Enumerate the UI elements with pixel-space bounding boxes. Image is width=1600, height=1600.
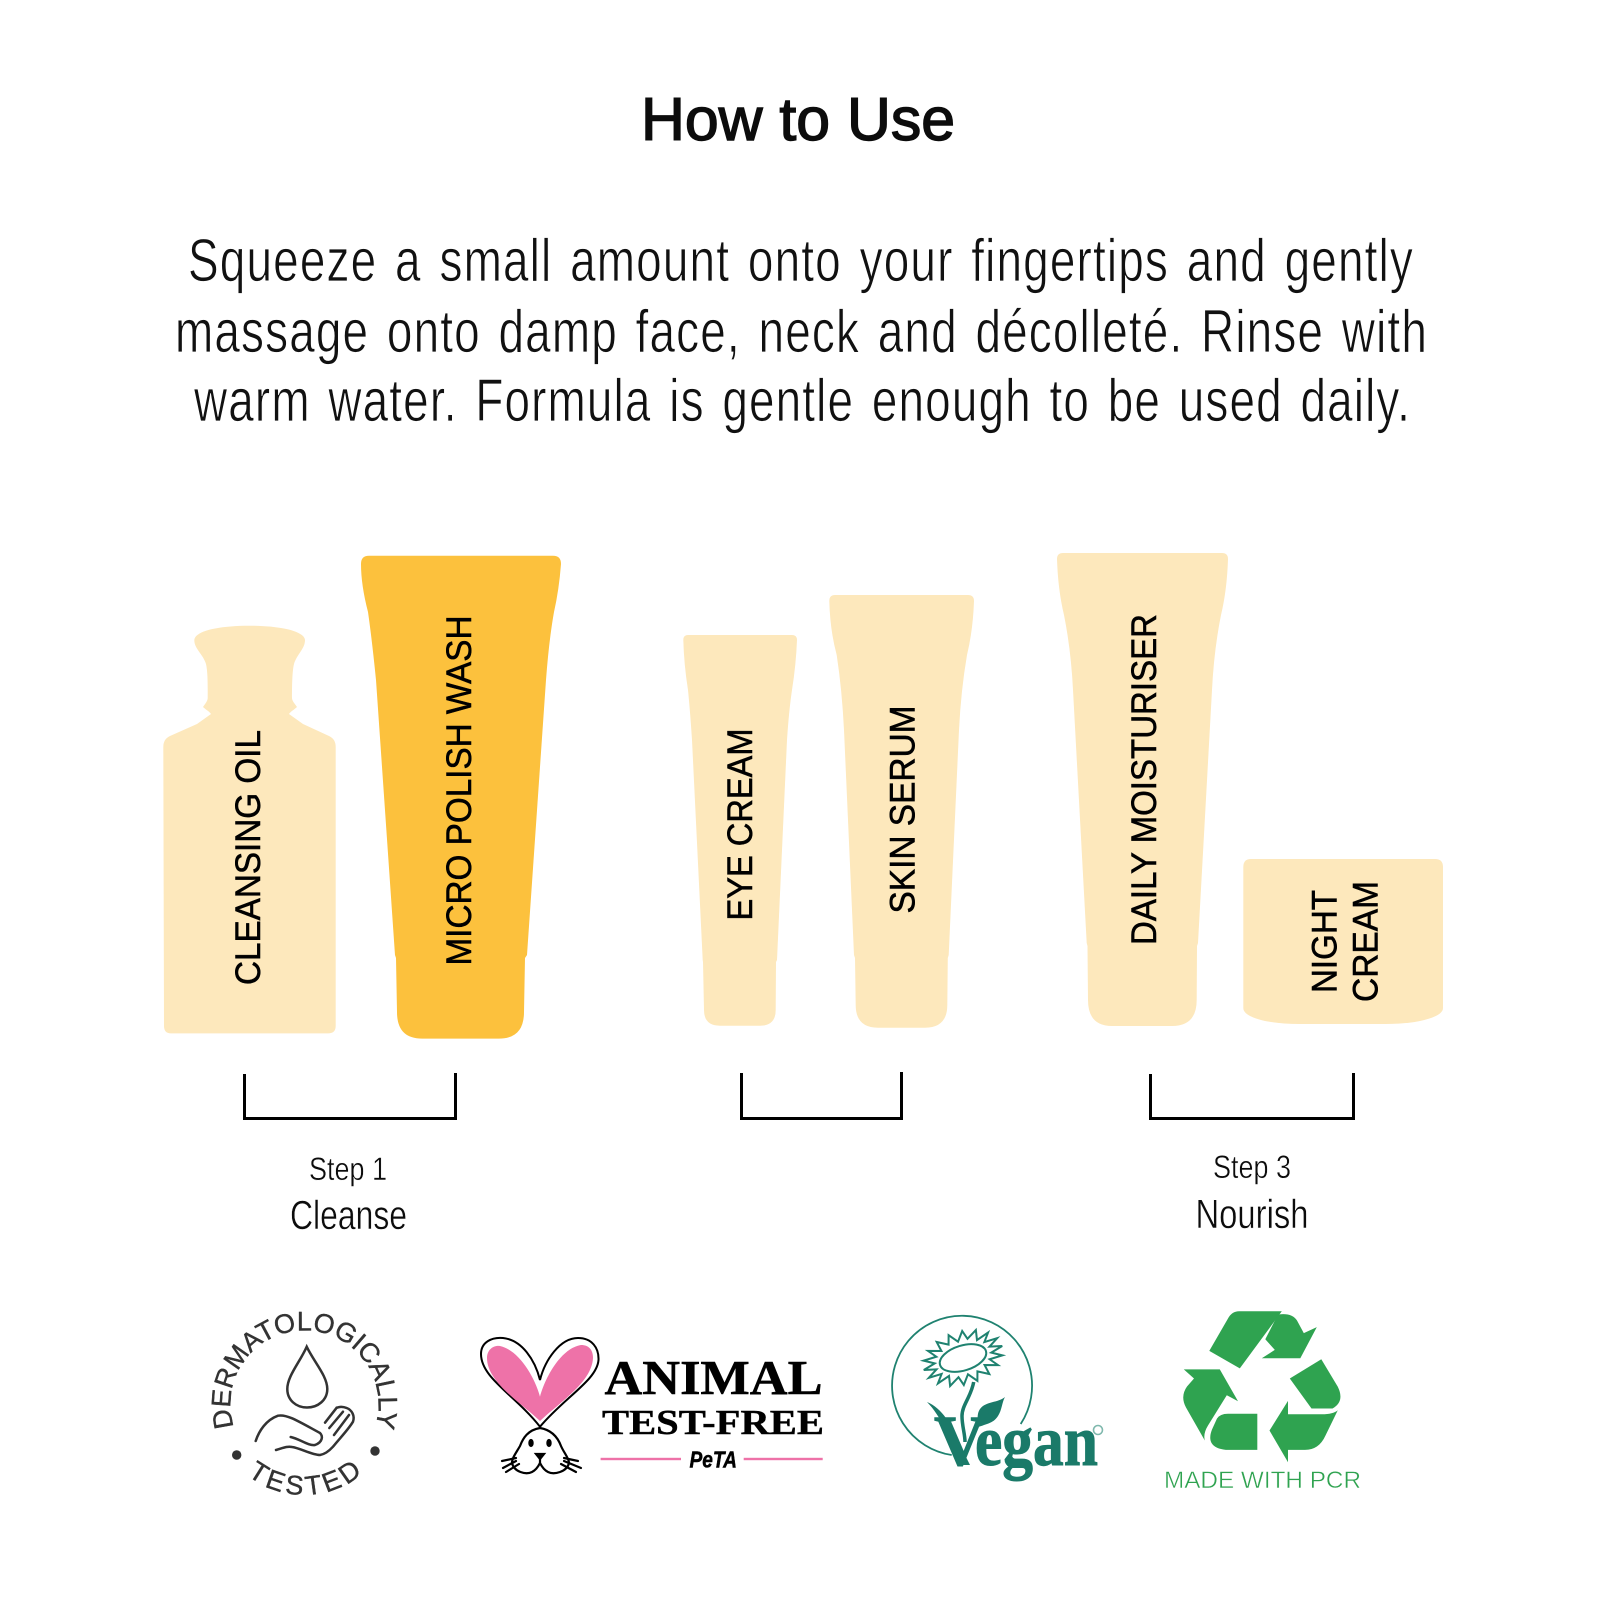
badge: peta animal test-free [481,1338,824,1473]
product: skin serum tube [829,595,974,1028]
label: eye cream: EYE CREAM [721,728,760,920]
label: daily moisturiser: DAILY MOISTURISER [1125,614,1164,945]
bracket: step 3 [1150,1073,1354,1118]
icon: bunny face [502,1428,581,1473]
step 3 caption: Step 3 [1213,1149,1291,1185]
label: cleansing oil: CLEANSING OIL [229,730,268,985]
circle outline [892,1316,1032,1455]
text: animal test-free: ANIMAL [604,1350,822,1405]
bracket: step 2 [742,1072,902,1118]
product: eye cream tube [683,635,797,1026]
wordmark: vegan: egan [975,1401,1098,1481]
badge: vegan sunflower [892,1316,1102,1481]
step 1 caption: Cleanse [290,1192,407,1238]
step 3 caption: Nourish [1196,1191,1308,1237]
title: How to Use [641,86,955,153]
badge: dermatologically tested [211,1312,398,1495]
product: night cream jar [1243,859,1443,1024]
icon: bunny ears heart [481,1338,599,1427]
icon: stem and leaf [927,1382,1005,1465]
icon: sunflower [916,1321,1010,1395]
label: micro polish wash: MICRO POLISH WASH [440,616,479,966]
product: daily moisturiser tube [1057,553,1228,1026]
text: animal test-free: TEST-FREE [602,1403,824,1442]
step 1 caption [290,1151,407,1238]
label: night cream: CREAM [1346,881,1386,1002]
badge: recycling symbol [1183,1311,1340,1462]
badge: dermatologically tested: DERMATOLOGICALLY [211,1312,398,1430]
caption: made with pcr: MADE WITH PCR [1164,1467,1361,1494]
label: night cream: NIGHT [1306,890,1344,993]
product: micro polish wash tube [361,556,561,1039]
product: cleansing oil bottle [163,626,336,1033]
wordmark: vegan: V [934,1401,986,1481]
registered mark [1094,1426,1102,1434]
icon: open hand [256,1407,354,1455]
badge: dermatologically tested: TESTED [252,1460,358,1495]
step 3 caption [1196,1149,1308,1237]
instructions paragraph [175,227,1428,434]
bracket: step 1 [244,1073,456,1118]
step 1 caption: Step 1 [309,1151,387,1187]
text: animal test-free [602,1350,824,1442]
peta rule and wordmark: PeTA [690,1446,737,1472]
label: night cream [1306,881,1386,1002]
icon: water drop [287,1347,327,1408]
label: skin serum: SKIN SERUM [884,706,922,914]
